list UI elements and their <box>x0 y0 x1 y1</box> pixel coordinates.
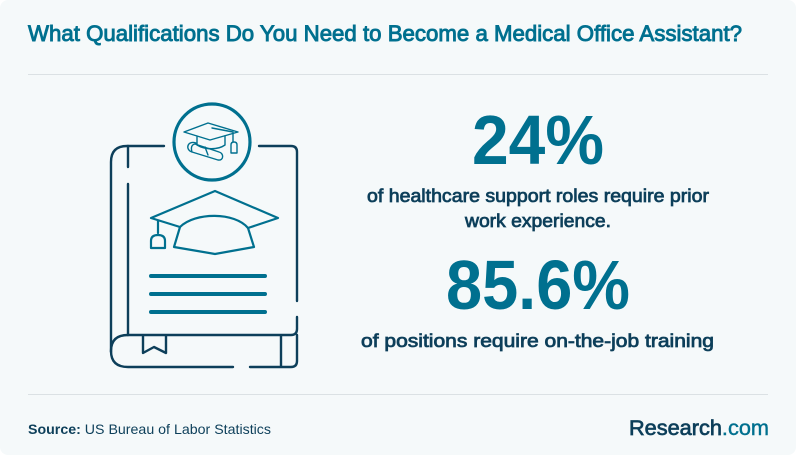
stat: 24% <box>367 101 714 231</box>
logo: Research.com <box>629 417 769 440</box>
stat description: of healthcare support roles require prior <box>367 186 709 206</box>
circle badge with cap and diploma <box>174 104 250 180</box>
stat description: of positions require on-the-job training <box>361 331 714 351</box>
book outline <box>111 146 297 367</box>
illustration: book with graduation cap <box>111 104 297 367</box>
stat description: work experience. <box>464 211 611 231</box>
large graduation cap <box>151 191 278 254</box>
title: What Qualifications Do You Need to Become a Medical Office Assistant? <box>28 21 742 46</box>
source: Source: US Bureau of Labor Statistics <box>28 421 271 437</box>
stat number: 24% <box>472 101 604 179</box>
stat: 85.6% <box>361 246 714 351</box>
stat number: 85.6% <box>446 246 630 324</box>
text lines <box>151 276 265 312</box>
